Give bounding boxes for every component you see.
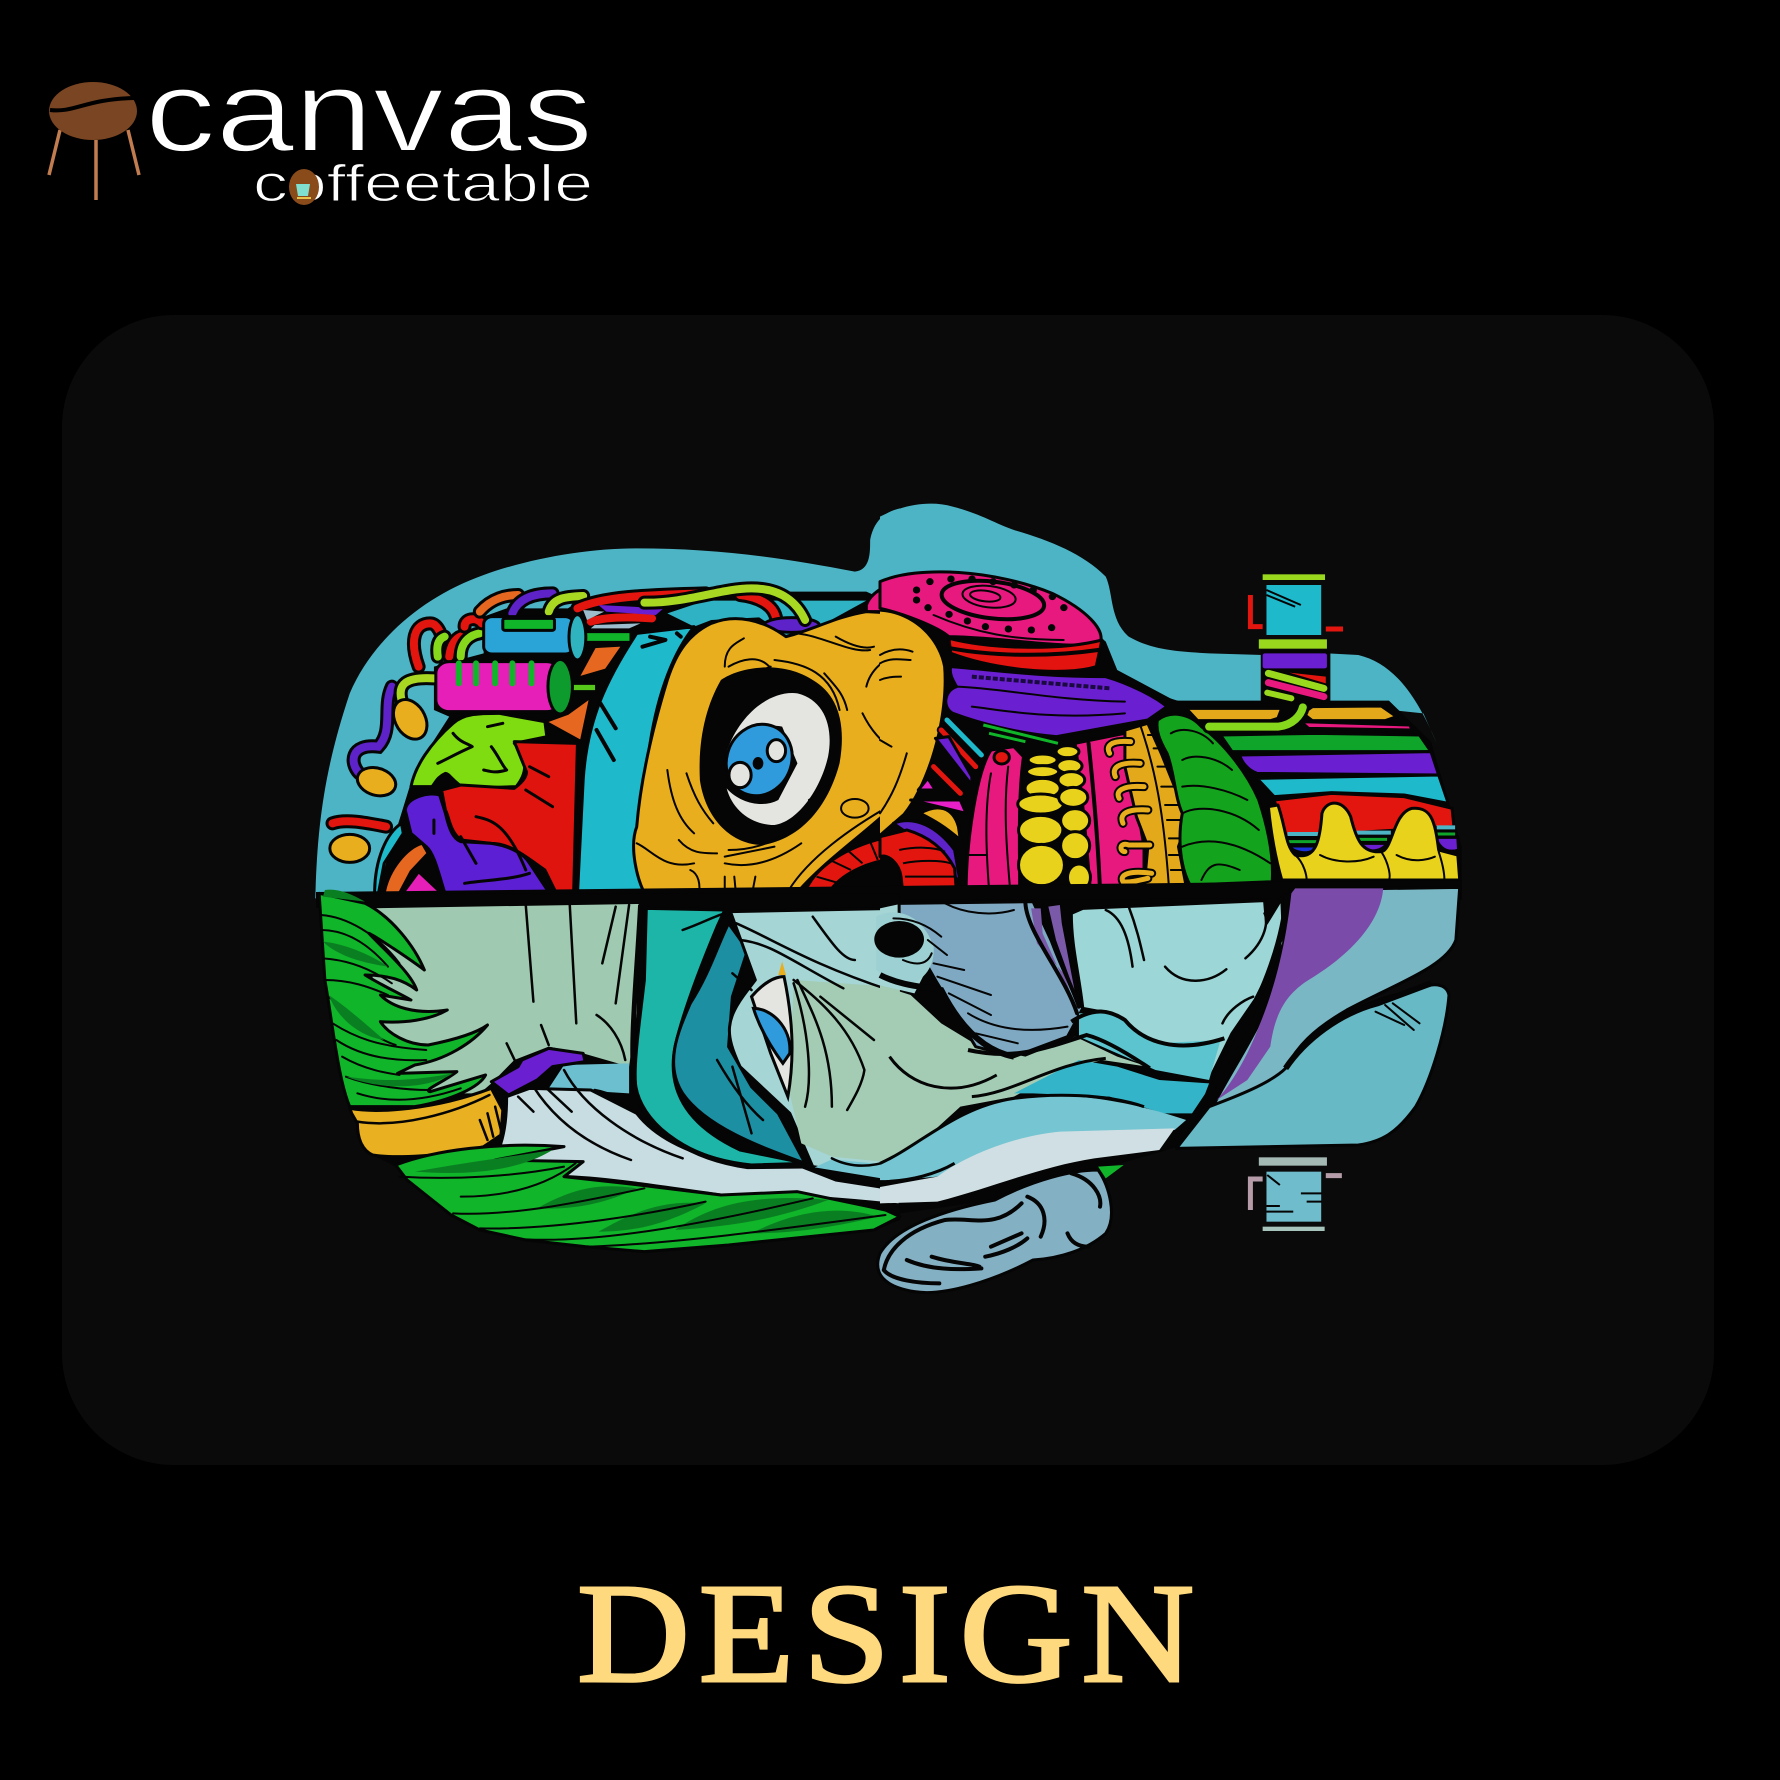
dark teal socket <box>674 923 805 1163</box>
purple creases <box>1031 905 1075 1007</box>
cyan wave <box>1079 1012 1221 1080</box>
spool top <box>1250 574 1343 703</box>
black backing <box>880 573 1462 892</box>
purple stripe <box>1240 752 1439 775</box>
hair strands <box>321 915 461 1100</box>
green triangle <box>1098 1165 1124 1178</box>
wave contour <box>1071 1011 1224 1045</box>
block contour <box>1286 983 1431 1068</box>
black backing <box>375 592 900 900</box>
rainbow lines under red <box>1288 827 1455 834</box>
cyan stripe <box>1257 775 1448 803</box>
teal cheek <box>635 908 805 1165</box>
lime brain mass <box>411 713 547 788</box>
red arch ribs <box>880 830 957 894</box>
yellow bulbs with red cap <box>330 695 433 862</box>
light blue band <box>880 1096 1186 1182</box>
yellow face panel <box>634 612 900 900</box>
gray nose <box>899 902 1083 1057</box>
pink tall column <box>966 747 1023 892</box>
nostril lobe <box>876 912 934 983</box>
purple arch <box>893 821 960 883</box>
black backing <box>900 898 1286 1213</box>
panel: lower face half, right <box>874 887 1460 1293</box>
logo: canvas coffeetable <box>49 46 593 213</box>
yellow corn columns <box>1018 746 1090 891</box>
yellow face continuation <box>880 612 944 833</box>
purple pad <box>946 667 1167 737</box>
green mass <box>1157 714 1273 885</box>
spool bottom <box>1250 1157 1342 1231</box>
nostril <box>874 921 924 958</box>
blue band <box>1014 1060 1209 1113</box>
sage cheek <box>790 980 900 1163</box>
pale white cloth <box>491 1088 900 1205</box>
icon: coffee cup <box>289 169 319 205</box>
disc edge <box>866 580 900 612</box>
yellow teeth <box>1268 803 1460 880</box>
cyan sliver <box>375 823 403 893</box>
green hair bottom <box>396 1145 900 1252</box>
red plate <box>949 638 1102 671</box>
light cheek <box>1071 898 1284 1080</box>
orange carrot and magenta tip <box>384 843 428 893</box>
wrinkle lines <box>683 913 900 1166</box>
dark hair patches <box>323 890 453 1086</box>
panel: upper machine half, right <box>880 504 1462 894</box>
pad microtext <box>972 677 1110 688</box>
pink disc <box>880 572 1101 645</box>
magenta stripe <box>1301 722 1412 730</box>
icon: coffee bean table <box>49 82 139 200</box>
eye: blue looking down <box>752 962 792 1097</box>
purple brain mass <box>405 794 551 895</box>
gold cuff <box>350 1088 503 1157</box>
panel: lower face half, left <box>319 890 900 1252</box>
small wires <box>911 720 1058 840</box>
lower block <box>1177 985 1449 1148</box>
lime tube <box>1209 707 1303 727</box>
orange wedges <box>577 645 623 678</box>
purple fragment <box>491 1048 585 1095</box>
sage cheek <box>880 985 1148 1163</box>
divider band between halves <box>316 880 1462 908</box>
light blue band at cheek base <box>815 1159 900 1181</box>
logo wordmark: coffeetable: coffeetable <box>253 155 593 213</box>
pale area under nostril <box>880 903 930 993</box>
teal head background right <box>880 504 1437 743</box>
band marks <box>597 633 681 760</box>
red arch <box>805 835 900 892</box>
sage forehead <box>365 904 639 1093</box>
purple and blue beads <box>1289 846 1318 853</box>
face fold lines <box>637 633 900 900</box>
panel: upper machine half, left <box>315 508 900 900</box>
pink spine <box>1075 733 1144 891</box>
logo wordmark: canvas: canvas <box>145 46 593 176</box>
brain fold lines <box>434 723 553 883</box>
gold bars <box>1186 708 1282 721</box>
ear <box>878 1170 1111 1293</box>
ear lines <box>884 1173 1100 1283</box>
cheek lines <box>1106 907 1266 1023</box>
purple hair sweep <box>1213 887 1460 1107</box>
thick face contour <box>633 905 805 1167</box>
cyan forehead band <box>577 627 694 895</box>
teal head background left <box>315 508 900 898</box>
iris <box>719 719 800 801</box>
purple shape <box>1217 888 1383 1100</box>
tubes <box>354 588 819 773</box>
lower nose contour <box>880 975 1014 1057</box>
gold ladder <box>1125 723 1188 887</box>
teal strip under top line <box>667 601 866 635</box>
pale face <box>729 908 900 1180</box>
light teal stripe <box>549 1063 629 1093</box>
gold hooks on spine <box>1108 741 1152 882</box>
cheek contour <box>880 1057 1144 1182</box>
blue cylinder <box>484 615 631 660</box>
magenta cylinder <box>436 659 597 714</box>
white band <box>880 1128 1175 1203</box>
eye white <box>727 693 830 825</box>
panel: rounded product mat <box>62 315 1714 1465</box>
eye socket <box>700 667 842 845</box>
cloth folds <box>518 1070 683 1160</box>
nose wrinkles <box>893 903 1067 1043</box>
heading: DESIGN: DESIGN <box>577 1554 1203 1712</box>
small bump <box>841 799 869 818</box>
bottom strand patches <box>415 1150 878 1233</box>
red stripe <box>1274 793 1454 837</box>
green stripe <box>1221 733 1431 752</box>
green hair side <box>319 893 487 1107</box>
disc rings and dots <box>916 576 1064 640</box>
forehead lines <box>507 905 629 1063</box>
red brain mass <box>442 742 577 895</box>
artwork: face illustration <box>315 504 1462 1293</box>
yellow face folds <box>880 649 913 813</box>
black backing <box>319 893 900 1252</box>
neck contour <box>1182 893 1288 1133</box>
